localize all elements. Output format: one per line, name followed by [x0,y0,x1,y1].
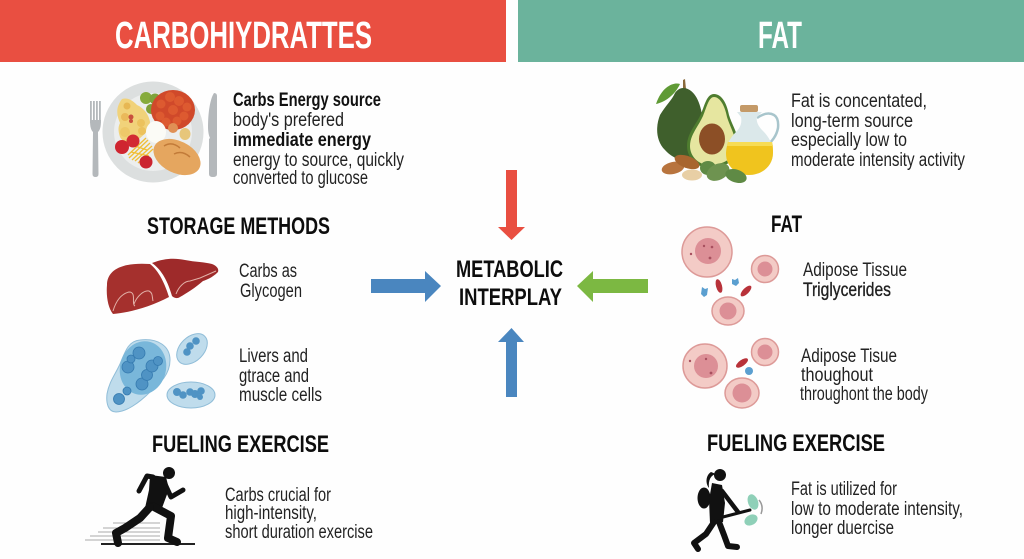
center: metabolic interplay [456,256,563,311]
text: carbs crucial for [225,485,373,543]
text: carbs as glycogen [239,261,302,302]
text: fat is concentrated [791,91,965,171]
center: metabolic interplay: INTERPLAY [459,284,562,311]
header: carbohydrates: CARBOHIYDRATTES [115,15,372,57]
arrow: green left [577,271,648,302]
icon: liver [107,259,218,314]
text: fat is utilized for: longer duercise [791,518,894,539]
text: livers and muscle cells [239,346,322,406]
icon: runner [85,467,195,545]
text: carbs crucial for: high-intensity, [225,503,317,524]
header: fat [518,0,1024,62]
text: fat is concentrated: long-term source [791,111,913,132]
text: fat is utilized for: low to moderate intensity, [791,499,963,520]
text: carbs energy source: body's prefered [233,110,344,131]
text: adipose tissue triglycerides: Triglycerides [803,280,891,301]
header: fat: FAT [758,15,802,57]
text: carbs energy source [233,90,404,189]
text: adipose tissue triglycerides: Adipose Tissue [803,260,907,281]
arrow: red down [498,170,525,240]
text: fat is concentrated: especially low to [791,130,907,151]
text: adipose tissue throughout: throughont the body [800,384,928,405]
text: livers and muscle cells: Livers and [239,346,308,367]
icon: avocado, oil jar and nuts [656,79,778,186]
heading: storage methods: STORAGE METHODS [147,213,330,240]
text: fat is concentrated: moderate intensity activity [791,150,965,171]
text: carbs crucial for: short duration exercise [225,522,373,543]
text: carbs energy source: converted to glucose [233,168,368,189]
text: carbs as glycogen: Glycogen [240,281,302,302]
heading: fueling exercise (carbs): FUELING EXERCISE [152,431,329,458]
text: adipose tissue throughout [800,346,928,405]
header: carbohydrates [0,0,506,62]
center: metabolic interplay: METABOLIC [456,256,563,283]
text: fat is utilized for [791,479,963,539]
icon: adipose cells with triglycerides [682,227,778,325]
text: livers and muscle cells: gtrace and [239,366,309,387]
text: carbs energy source: energy to source, quickly [233,150,404,171]
text: fat is utilized for: Fat is utilized for [791,479,898,500]
text: adipose tissue throughout: thoughout [801,365,874,386]
heading: fat: FAT [771,211,802,238]
text: adipose tissue triglycerides [803,260,907,301]
icon: adipose cells throughout body [683,338,778,408]
icon: plate of food with fork and knife [90,82,217,182]
text: carbs as glycogen: Carbs as [239,261,297,282]
text: carbs crucial for: Carbs crucial for [225,485,332,506]
icon: glycogen granules in cells [107,328,215,412]
arrow: blue right [371,271,441,302]
text: adipose tissue throughout: Adipose Tisue [801,346,897,367]
text: fat is concentrated: Fat is concentated, [791,91,927,112]
heading: fueling exercise (fat): FUELING EXERCISE [707,430,885,457]
arrow: blue up [498,328,524,397]
text: livers and muscle cells: muscle cells [239,385,322,406]
text: carbs energy source: Carbs Energy source [233,90,381,111]
icon: walker with backpack [694,469,762,549]
text: carbs energy source: immediate energy [233,130,371,151]
